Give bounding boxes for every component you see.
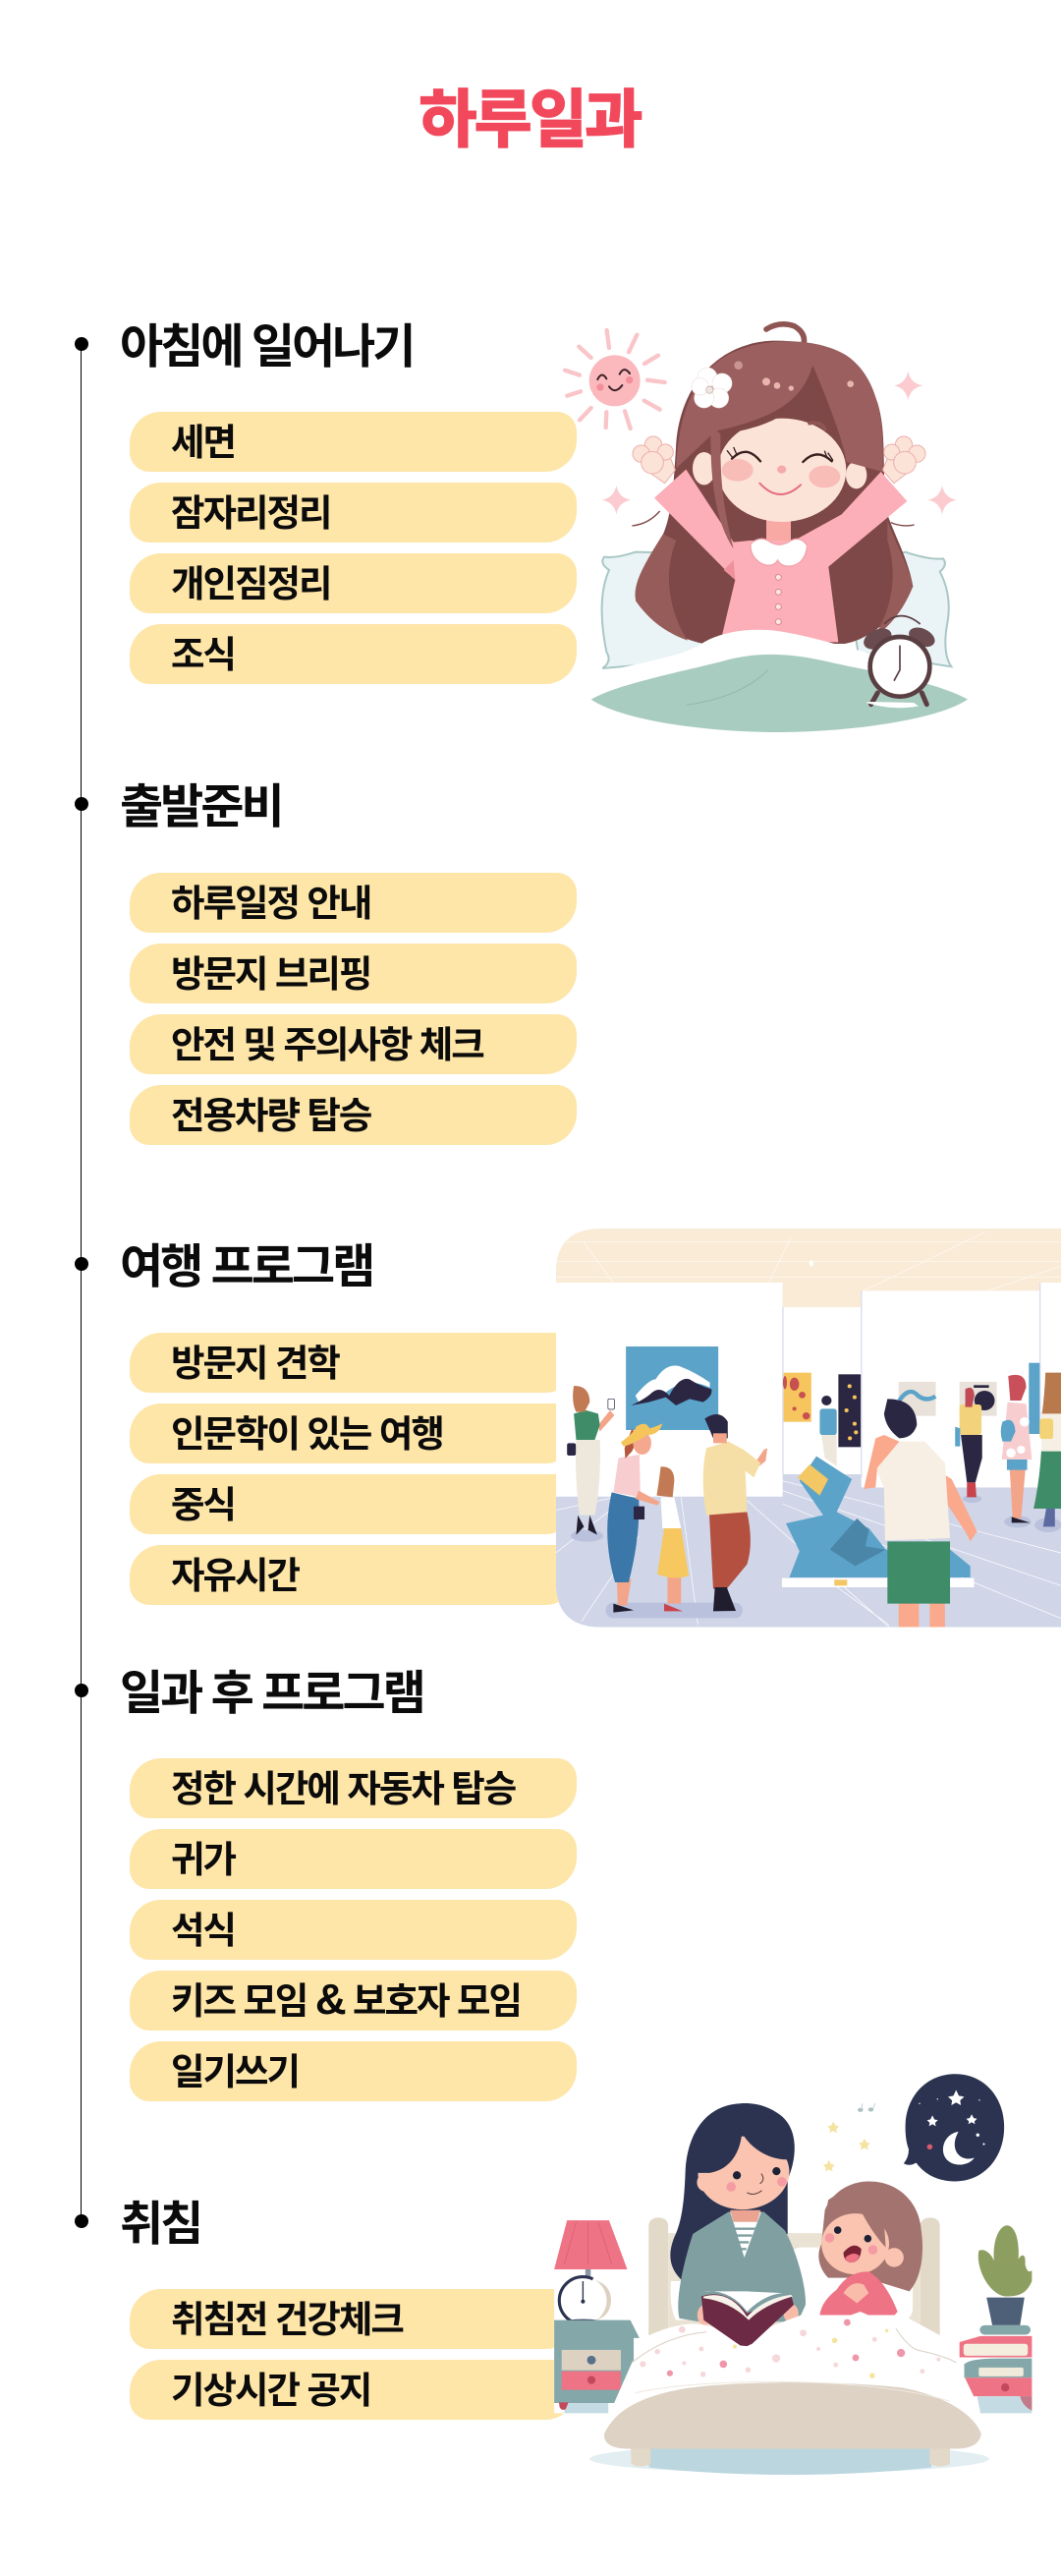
item	[130, 1333, 577, 1393]
open book	[701, 2291, 794, 2346]
item	[130, 624, 577, 684]
item: 개인짐정리	[171, 563, 330, 604]
section: after-schedule program	[75, 1668, 577, 2101]
item	[130, 1545, 577, 1605]
blanket with star pattern	[606, 2315, 980, 2420]
gallery walls	[556, 1283, 1061, 1497]
item: 키즈 모임 & 보호자 모임	[171, 1975, 521, 2024]
item: 석식	[171, 1910, 235, 1951]
illustration: girl waking up in bed	[562, 321, 968, 732]
pillows	[602, 552, 951, 668]
striped shirt	[730, 2210, 761, 2258]
floor	[556, 1474, 1061, 1628]
heading: 취침	[120, 2199, 200, 2251]
back hair	[632, 341, 915, 644]
item	[130, 1403, 577, 1463]
neck and collar	[751, 518, 808, 566]
plant	[978, 2225, 1032, 2334]
pink pajamas	[654, 470, 907, 642]
ceiling	[556, 1229, 1061, 1309]
title: 하루일과	[419, 85, 641, 155]
pillows	[671, 2248, 913, 2321]
item	[130, 483, 577, 543]
item	[130, 2360, 577, 2420]
icon: alarm clock	[861, 616, 938, 708]
visitor with phone	[567, 1386, 614, 1535]
mother: sweater	[678, 2211, 806, 2321]
item	[130, 553, 577, 613]
item: 조식	[171, 634, 235, 675]
heading: 출발준비	[120, 781, 282, 833]
illustration: mother reading bedtime story	[554, 2074, 1032, 2475]
heading: 여행 프로그램	[120, 1241, 372, 1293]
girl	[818, 2181, 922, 2323]
item: 하루일정 안내	[171, 883, 370, 924]
section: departure preparation	[75, 781, 577, 1145]
man in plaid shirt	[703, 1414, 767, 1611]
icon: night thought bubble with moon and stars	[904, 2074, 1004, 2181]
woman in hat	[607, 1423, 662, 1613]
item	[130, 873, 577, 933]
section: travel program	[75, 1241, 558, 1605]
timeline dot	[75, 2214, 88, 2228]
child in yellow dress	[656, 1466, 689, 1611]
timeline dot	[75, 1684, 88, 1697]
stack of books and drawer	[960, 2336, 1032, 2413]
icon: sparkles	[602, 372, 957, 514]
painting: dark swirl	[960, 1382, 997, 1416]
painting: blue wave	[899, 1382, 936, 1416]
man in foreground	[864, 1399, 977, 1628]
white backdrop	[554, 2213, 1032, 2413]
item	[130, 1474, 577, 1534]
timeline dot	[75, 1257, 88, 1271]
blanket	[586, 630, 970, 732]
icon: smiling sun	[565, 330, 665, 429]
painting: yellow with red blobs	[783, 1373, 811, 1422]
face	[718, 419, 846, 522]
illustration: art gallery visit	[556, 1229, 1061, 1628]
item	[130, 412, 577, 472]
icon: white flower	[692, 368, 732, 408]
section: bedtime	[75, 2199, 564, 2420]
section: morning wake-up	[75, 321, 577, 684]
item: 일기쓰기	[171, 2051, 299, 2092]
timeline line	[81, 344, 82, 2221]
nightstand	[554, 2320, 640, 2413]
mother: hair	[670, 2103, 795, 2279]
heading: 아침에 일어나기	[120, 321, 413, 373]
blue panel	[1029, 1363, 1039, 1434]
mother: face	[690, 2112, 793, 2212]
item: 인문학이 있는 여행	[171, 1413, 443, 1455]
shadows	[571, 1495, 1061, 1618]
timeline dot	[75, 337, 88, 351]
item: 자유시간	[171, 1555, 299, 1596]
item	[130, 1900, 577, 1960]
visitor in floral dress	[1001, 1375, 1032, 1522]
bed footboard	[604, 2381, 981, 2467]
visitor in striped shirt	[955, 1388, 982, 1497]
item: 방문지 견학	[171, 1343, 339, 1384]
item	[130, 944, 577, 1003]
item: 전용차량 탑승	[171, 1095, 370, 1136]
ears	[693, 452, 866, 488]
headboard	[648, 2217, 940, 2335]
icon: music notes	[858, 2103, 875, 2112]
item: 잠자리정리	[171, 492, 330, 534]
item	[130, 1829, 577, 1889]
item: 안전 및 주의사항 체크	[171, 1024, 483, 1065]
painting: dark with dots	[838, 1374, 861, 1447]
distant visitor at dark painting	[819, 1396, 837, 1466]
bed shadow	[589, 2444, 989, 2475]
item	[130, 2289, 577, 2349]
mother: hands	[698, 2304, 799, 2325]
sculpture	[782, 1457, 974, 1587]
table lamp	[554, 2220, 628, 2326]
visitor in green skirt	[1033, 1373, 1061, 1526]
front hair	[676, 341, 883, 548]
item: 기상시간 공지	[171, 2370, 370, 2411]
white backdrop	[556, 1496, 577, 1602]
buttons	[775, 574, 781, 625]
icon: floating stars	[823, 2122, 870, 2171]
heading: 일과 후 프로그램	[120, 1668, 423, 1720]
item	[130, 1971, 577, 2031]
item	[130, 2041, 577, 2101]
item: 방문지 브리핑	[171, 953, 370, 995]
item	[130, 1085, 577, 1145]
item: 중식	[171, 1484, 235, 1525]
item: 정한 시간에 자동차 탑승	[171, 1768, 515, 1809]
item: 세면	[171, 422, 235, 463]
item	[130, 1758, 577, 1818]
timeline dot	[75, 797, 88, 811]
item: 취침전 건강체크	[171, 2299, 403, 2340]
hands	[633, 436, 925, 484]
hair tuft	[766, 324, 805, 343]
painting: blue mountains	[626, 1346, 718, 1430]
item: 귀가	[171, 1839, 235, 1880]
item	[130, 1014, 577, 1074]
